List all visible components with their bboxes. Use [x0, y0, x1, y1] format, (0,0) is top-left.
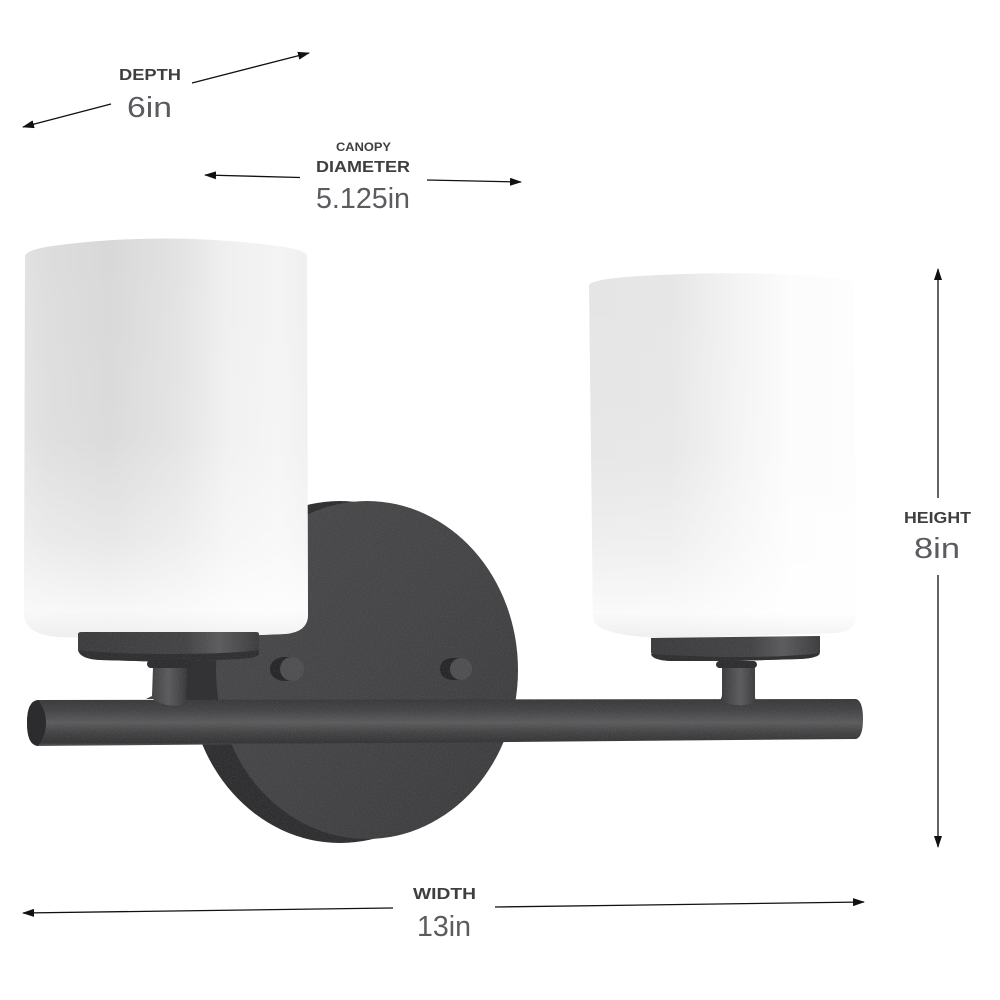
height arrow up: [937, 269, 939, 498]
canopy label: CANOPY: [336, 142, 391, 154]
left stem: [146, 660, 191, 706]
left shade holder cap: [78, 632, 259, 662]
horizontal bar: [27, 699, 863, 746]
shadow behind left stem: [186, 660, 216, 702]
diameter arrow right: [427, 180, 521, 182]
depth arrow upper: [192, 53, 309, 83]
height label: HEIGHT: [904, 510, 971, 527]
width label: WIDTH: [413, 886, 476, 903]
depth value: 6in: [127, 92, 172, 124]
height dimension: [904, 269, 971, 847]
right stem: [716, 661, 757, 705]
canopy wall plate: [188, 501, 518, 843]
left glass shade: [24, 238, 308, 639]
diameter value: 5.125in: [316, 183, 410, 215]
right shade holder cap: [651, 636, 820, 661]
width value: 13in: [417, 911, 471, 943]
canopy diameter dimension: [205, 142, 521, 215]
right glass shade: [589, 273, 857, 638]
width arrow left: [23, 908, 393, 913]
depth arrow lower: [23, 104, 111, 127]
height arrow down: [937, 575, 939, 847]
diameter arrow left: [205, 175, 300, 178]
width dimension: [23, 886, 864, 943]
width arrow right: [495, 902, 864, 907]
depth label: DEPTH: [119, 67, 181, 84]
diameter label: DIAMETER: [316, 159, 410, 176]
mounting peg left: [270, 657, 304, 681]
light fixture: [24, 238, 863, 843]
depth dimension: [23, 53, 309, 127]
mounting peg right: [440, 658, 472, 680]
bar left end cap: [27, 700, 46, 746]
height value: 8in: [914, 533, 960, 565]
